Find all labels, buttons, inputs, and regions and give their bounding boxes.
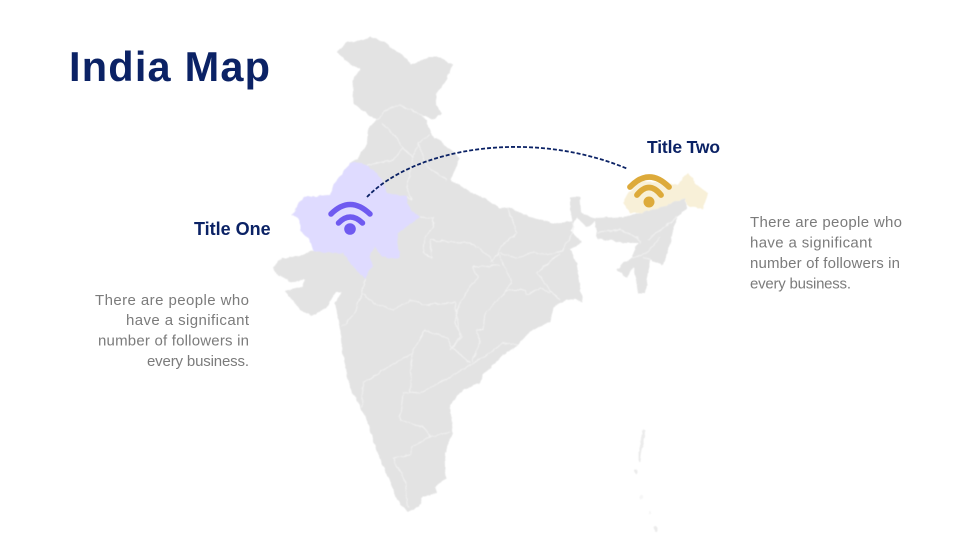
text block: left description: have a significant: [126, 312, 250, 329]
state: Rajasthan highlighted: [292, 162, 420, 278]
state: Arunachal Pradesh highlighted: [623, 173, 708, 213]
text block: right description: have a significant: [750, 234, 873, 252]
map of India: [273, 37, 708, 532]
text block: left description: There are people who: [95, 292, 249, 309]
text block: right description: [750, 214, 902, 292]
icon: purple wifi: [331, 204, 370, 235]
text block: right description: There are people who: [750, 214, 902, 231]
mainland: [273, 37, 687, 512]
heading: Title One: Title One: [194, 219, 271, 239]
heading: Title Two: Title Two: [647, 137, 720, 157]
Andaman and Nicobar islands: [634, 429, 658, 532]
text block: left description: every business.: [147, 353, 249, 370]
text block: left description: number of followers in: [98, 332, 249, 350]
text block: right description: every business.: [750, 276, 851, 292]
text block: left description: [95, 292, 250, 370]
icon: gold wifi: [630, 177, 669, 208]
dashed connector arc: [367, 147, 628, 197]
state borders: [342, 105, 677, 507]
text block: right description: number of followers in: [750, 255, 900, 272]
title: India Map: [69, 43, 271, 90]
